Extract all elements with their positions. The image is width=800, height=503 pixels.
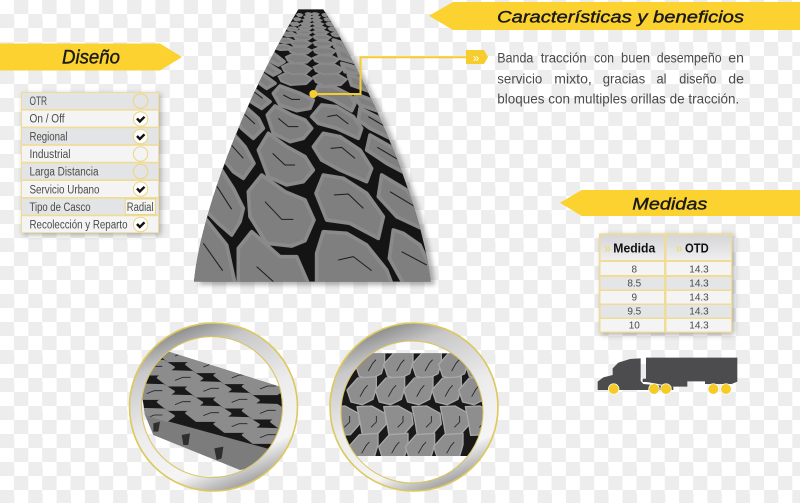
text block: description: en — [728, 50, 744, 66]
heading: Diseño: Diseño — [62, 48, 120, 68]
text block: description: Banda — [497, 50, 533, 66]
banner: Medidas: Medidas — [632, 194, 708, 213]
table values: 14.3 — [689, 279, 709, 290]
table values: 14.3 — [689, 321, 709, 332]
table values: 14.3 — [689, 307, 709, 318]
row labels: Servicio Urbano — [30, 184, 100, 196]
banner: Diseño — [0, 44, 182, 70]
row labels: Regional — [30, 131, 68, 143]
text block: description: tracción — [541, 50, 587, 66]
row labels — [30, 96, 128, 232]
table values: 9.5 — [627, 307, 642, 318]
panel: design table — [21, 92, 161, 235]
panel: sizes table — [599, 233, 734, 334]
ring: angled tread view — [129, 322, 315, 492]
table header: » — [604, 241, 611, 256]
text block: description: con — [594, 50, 614, 66]
row labels: Industrial — [30, 149, 70, 161]
table values: 9 — [632, 293, 638, 304]
row markers — [133, 94, 148, 232]
table header: OTD — [685, 241, 709, 256]
text block: description: servicio — [497, 70, 542, 86]
table header — [604, 241, 709, 256]
text block: description: diseño — [679, 70, 717, 86]
sipes — [265, 202, 293, 219]
connector line with dot: » — [473, 51, 480, 65]
text block: description: de — [728, 70, 744, 86]
table values: 14.3 — [689, 293, 709, 304]
row labels: On / Off — [30, 114, 65, 126]
table values: 14.3 — [689, 265, 709, 276]
table values: 8.5 — [627, 279, 642, 290]
main tire tread — [192, 9, 435, 285]
table values — [627, 265, 709, 332]
table values: 8 — [632, 265, 638, 276]
text block: description: mixto, — [554, 70, 592, 86]
centre left blocks — [238, 232, 308, 283]
text block: description: buen — [621, 50, 650, 66]
banner: Medidas — [560, 190, 800, 216]
text block: description: bloques con multiples orillas de tracción. — [497, 90, 739, 106]
outer right blocks — [389, 230, 433, 283]
text block: description — [497, 50, 744, 106]
centre right blocks — [317, 232, 392, 283]
table header: » — [676, 241, 683, 256]
ring: flat tread view — [330, 322, 498, 492]
table header: Medida — [613, 241, 656, 256]
text block: description: desempeño — [657, 50, 722, 66]
row labels: Recolección y Reparto — [30, 220, 128, 232]
connector line with dot — [309, 50, 488, 98]
text block: description: gracias — [603, 70, 645, 86]
upper rows — [274, 13, 347, 86]
outer left blocks — [192, 217, 235, 283]
banner: Características y beneficios — [429, 2, 800, 30]
banner: Características y beneficios: Características y beneficios — [497, 8, 744, 26]
row labels: Tipo de Casco — [30, 202, 90, 214]
table values: 10 — [629, 321, 640, 332]
row labels: Larga Distancia — [30, 167, 99, 179]
icon: truck — [598, 358, 737, 394]
tag arrow — [466, 50, 488, 64]
row labels: OTR — [30, 96, 47, 108]
text block: description: al — [656, 70, 666, 86]
panel: design table: Radial — [127, 202, 154, 214]
